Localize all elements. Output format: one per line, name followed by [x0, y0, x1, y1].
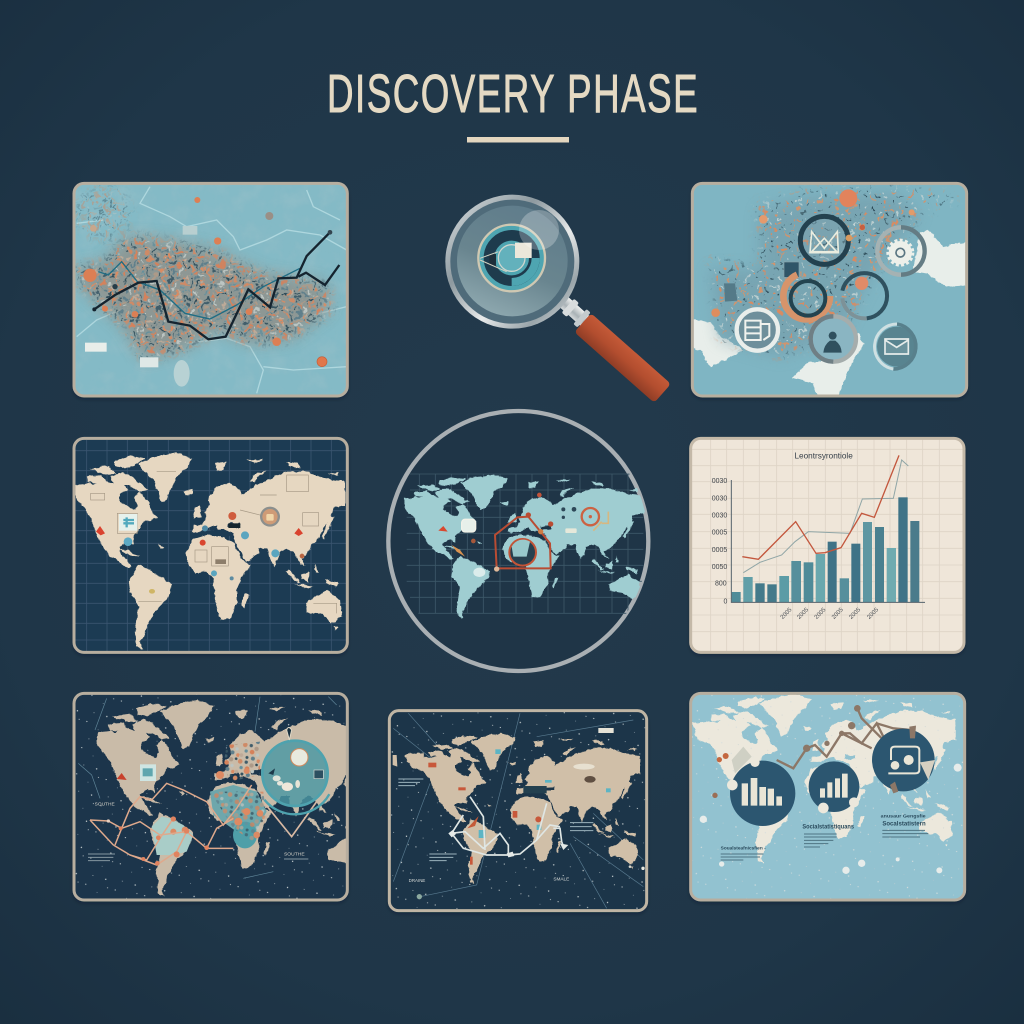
handle neck	[555, 293, 593, 330]
title underline	[467, 137, 569, 142]
red trend line	[742, 455, 899, 559]
panel: world map with grid	[74, 438, 347, 652]
thin teal series	[98, 262, 300, 319]
x axis labels: 2005	[814, 607, 828, 621]
centre circle with world map	[388, 411, 648, 671]
panel frame	[74, 183, 347, 396]
routes	[90, 783, 252, 865]
brown network	[777, 708, 912, 768]
world map	[76, 453, 345, 649]
x axis labels: 2005	[866, 607, 881, 621]
y axis labels: 0030	[712, 513, 727, 520]
panel frame	[389, 711, 647, 911]
teal target	[261, 727, 330, 838]
y axis labels: 0030	[712, 478, 727, 485]
panel: icons on scatter map	[687, 177, 977, 400]
y axis labels: 0005	[712, 530, 727, 537]
lens highlight	[519, 210, 559, 250]
world map	[98, 700, 367, 897]
data circle: bars left	[727, 758, 795, 826]
map highlights	[438, 493, 608, 577]
metal rim	[445, 195, 579, 329]
ring icon: open arc	[842, 273, 887, 318]
ring icon: document	[737, 309, 778, 351]
panel background	[691, 438, 964, 652]
red handle	[574, 313, 671, 403]
panel background	[691, 693, 965, 900]
caption text: anusaur Gengsfie	[881, 813, 926, 818]
ring icon: envelope	[875, 324, 917, 369]
world map	[403, 733, 640, 884]
map markers	[96, 507, 304, 594]
panel frame	[74, 693, 347, 900]
panel frame	[691, 693, 965, 900]
y axis labels: 0	[723, 599, 727, 606]
map texture	[694, 184, 966, 394]
circle ring	[388, 411, 648, 671]
ring icon: orange and dark	[783, 273, 830, 319]
data circle: bars middle	[809, 761, 859, 813]
panel frame	[691, 438, 964, 652]
panel background	[74, 693, 347, 900]
axes	[731, 480, 925, 602]
callout labels: DRAINE	[409, 878, 426, 884]
caption text: Socialstatistiquans	[802, 825, 855, 831]
bars	[732, 497, 919, 602]
routes	[452, 797, 563, 855]
ring icon: chart tent	[800, 216, 852, 264]
panel background	[389, 711, 647, 911]
y axis labels	[712, 478, 727, 606]
x axis labels: 2005	[848, 607, 863, 621]
callout labels	[409, 878, 570, 882]
square markers	[784, 262, 799, 277]
magnifying glass	[445, 195, 671, 403]
panel frame	[692, 183, 967, 396]
panel background	[692, 183, 967, 396]
y axis labels: 0030	[712, 495, 727, 502]
chart title: Leontrsyrontiole	[794, 452, 853, 461]
ring icon: person	[811, 316, 856, 362]
caption text: Soualsteafnicsfien -	[721, 846, 766, 852]
x axis labels: 2005	[796, 607, 811, 621]
x axis labels: 2005	[831, 607, 845, 621]
y axis labels: 0050	[712, 564, 727, 571]
map texture	[76, 185, 346, 394]
y axis labels: 0005	[712, 547, 727, 554]
thick black series	[94, 232, 330, 339]
coloured regions	[117, 742, 267, 855]
panel background	[74, 438, 347, 652]
ring icon: gear	[877, 227, 925, 275]
panel: world map with salmon routes	[74, 693, 367, 900]
x axis labels: 2005	[780, 607, 794, 621]
lens content: ring emblem	[478, 225, 545, 291]
panel frame	[74, 438, 347, 652]
title: DISCOVERY PHASE	[327, 63, 698, 124]
lens	[450, 200, 574, 324]
y axis labels: 800	[715, 581, 727, 588]
world map	[692, 694, 956, 864]
map labels	[95, 802, 305, 858]
map labels: SOUTHE	[284, 852, 305, 858]
data circle: photo icon	[872, 726, 935, 793]
panel: bar and line chart	[691, 438, 964, 652]
x axis labels	[780, 607, 878, 620]
panel: scatter map with line chart	[67, 177, 357, 400]
caption text	[721, 813, 926, 852]
grey trend line	[743, 460, 908, 573]
markers	[428, 728, 614, 865]
map labels: SOUTHE	[95, 802, 115, 808]
callout labels: SMALE	[553, 876, 569, 881]
panel: light world map with data circles	[691, 693, 965, 900]
panel: world map with white routes	[389, 711, 647, 911]
panel background	[74, 183, 347, 396]
world map	[404, 475, 644, 618]
caption text: Socalstatistern	[882, 822, 926, 828]
